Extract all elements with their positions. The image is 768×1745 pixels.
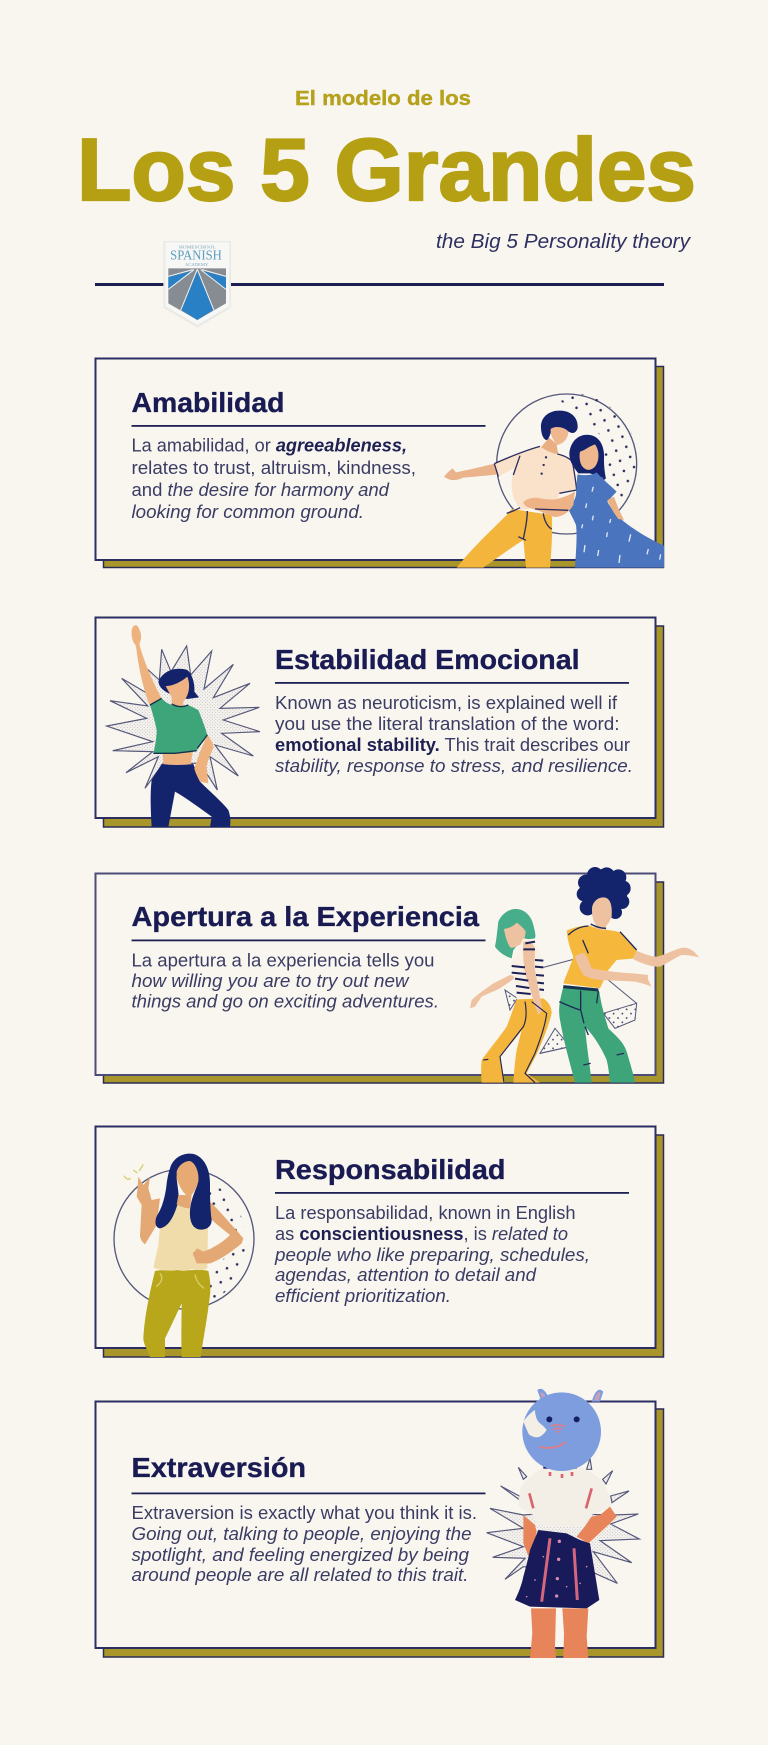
illustration: two people dancing [470, 867, 699, 1083]
title: Los 5 Grandes: Los 5 Grandes [77, 120, 696, 219]
body text: efficient prioritization. [275, 1286, 451, 1306]
logo: Homeschool Spanish Academy shield: SPANISH [170, 248, 222, 263]
body text: things and go on exciting adventures. [132, 992, 439, 1012]
body text: people who like preparing, schedules, [274, 1245, 590, 1265]
logo: Homeschool Spanish Academy shield: HOMESCHOOL [179, 245, 216, 250]
heading: Amabilidad [132, 387, 284, 418]
panel: Estabilidad Emocional [96, 618, 664, 827]
body text: spotlight, and feeling energized by being [132, 1545, 469, 1565]
body text [132, 436, 416, 522]
card frame with olive offset shadow [96, 1402, 664, 1657]
body text: Known as neuroticism, is explained well if [275, 693, 618, 713]
body text [132, 1503, 477, 1585]
panel: Responsabilidad [96, 1126, 664, 1357]
panel: Apertura a la Experiencia [96, 867, 699, 1083]
logo: Homeschool Spanish Academy shield: ACADEMY [185, 262, 208, 267]
body text: emotional stability. This trait describes our [275, 735, 630, 755]
body text: and the desire for harmony and [132, 480, 390, 500]
body text: relates to trust, altruism, kindness, [132, 458, 416, 478]
card frame with olive offset shadow [96, 618, 664, 827]
panel: Extraversión [96, 1389, 664, 1658]
heading: Responsabilidad [275, 1154, 506, 1185]
body text: Going out, talking to people, enjoying the [132, 1524, 472, 1544]
body text: Extraversion is exactly what you think it is. [132, 1503, 477, 1523]
body text: looking for common ground. [132, 502, 364, 522]
body text [274, 1203, 590, 1306]
illustration: couple [444, 393, 664, 568]
body text: agendas, attention to detail and [275, 1265, 537, 1285]
card frame with olive offset shadow [96, 1126, 664, 1357]
body text [275, 693, 633, 776]
illustration: figure with rhino head [487, 1389, 639, 1658]
illustration: woman with raised arm on starburst [107, 625, 260, 827]
heading: Extraversión [132, 1452, 306, 1483]
panel: Amabilidad [96, 358, 664, 568]
illustration: woman with snapping fingers [114, 1154, 254, 1357]
header rule [95, 283, 664, 286]
logo: Homeschool Spanish Academy shield [163, 241, 231, 328]
body text: as conscientiousness, is related to [275, 1224, 568, 1244]
body text [132, 950, 439, 1012]
kicker: El modelo de los: El modelo de los [295, 87, 471, 110]
body text: around people are all related to this trait. [132, 1565, 468, 1585]
body text: how willing you are to try out new [132, 971, 410, 991]
heading: Apertura a la Experiencia [132, 901, 479, 932]
body text: stability, response to stress, and resilience. [275, 756, 633, 776]
card frame with olive offset shadow [96, 358, 664, 568]
subtitle: the Big 5 Personality theory [436, 231, 691, 253]
body text: La amabilidad, or agreeableness, [132, 436, 407, 456]
card frame with olive offset shadow [96, 874, 664, 1083]
header [77, 87, 696, 328]
body text: you use the literal translation of the word: [275, 714, 620, 734]
body text: La responsabilidad, known in English [275, 1203, 576, 1223]
body text: La apertura a la experiencia tells you [132, 950, 434, 970]
heading: Estabilidad Emocional [275, 644, 580, 675]
